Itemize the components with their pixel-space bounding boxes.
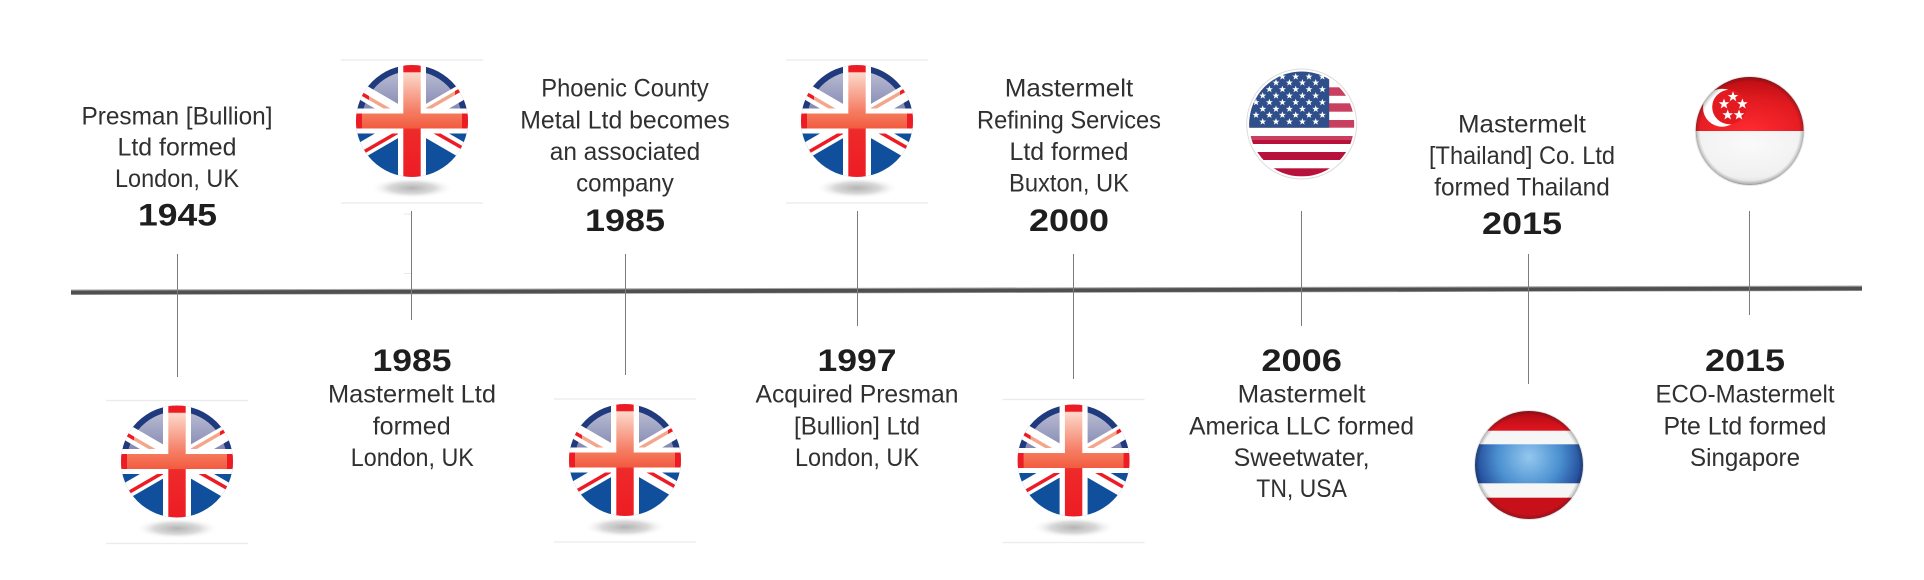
milestone: 1985 Mastermelt Ltd: Mastermelt Ltd <box>328 381 496 409</box>
milestone: 1985 Phoenic County: Metal Ltd becomes <box>520 106 730 134</box>
milestone: 1997 Acquired Presman: London, UK <box>795 444 919 472</box>
milestone: 2015 ECO-Mastermelt: Singapore <box>1690 444 1800 472</box>
milestone: 1945 Presman [Bullion] <box>82 102 272 233</box>
milestone: 2015 Mastermelt [Thailand]: 2015 <box>1482 205 1562 241</box>
milestone: 2015 ECO-Mastermelt: Pte Ltd formed <box>1664 412 1826 440</box>
milestone: 2006 Mastermelt America LLC: Sweetwater, <box>1234 444 1370 472</box>
milestone: 2006 Mastermelt America LLC <box>1189 342 1414 503</box>
milestone: 1997 Acquired Presman <box>756 342 958 472</box>
milestone: 1985 Phoenic County: Phoenic County <box>541 75 709 103</box>
milestone: 2006 Mastermelt America LLC: America LLC formed <box>1189 412 1414 440</box>
milestone: 2000 Mastermelt Refining Services: Mastermelt <box>1005 75 1133 103</box>
milestone: 1985 Mastermelt Ltd: formed <box>373 412 451 440</box>
milestone: 1997 Acquired Presman: Acquired Presman <box>756 381 958 409</box>
icon: UK flag 2000 <box>1003 400 1145 542</box>
icon: UK flag 1945 <box>106 400 248 544</box>
milestone: 1945 Presman [Bullion]: 1945 <box>138 197 217 233</box>
milestone: 1985 Phoenic County <box>520 75 730 238</box>
milestone: 1945 Presman [Bullion]: Presman [Bullion] <box>82 102 272 130</box>
milestone: 1945 Presman [Bullion]: London, UK <box>115 165 239 193</box>
milestone: 1985 Mastermelt Ltd <box>328 342 496 472</box>
icon: Thailand flag <box>1474 410 1584 520</box>
icon: UK flag 1997 <box>786 60 928 203</box>
timeline axis <box>71 288 1862 292</box>
milestone: 1985 Mastermelt Ltd: 1985 <box>372 342 452 378</box>
milestone: 2015 ECO-Mastermelt: ECO-Mastermelt <box>1656 380 1834 408</box>
icon: UK flag 1985 Mastermelt Ltd <box>341 60 483 203</box>
milestone: 2015 Mastermelt [Thailand]: formed Thailand <box>1434 174 1610 202</box>
icon: Singapore flag <box>1695 76 1805 186</box>
milestone: 1945 Presman [Bullion]: Ltd formed <box>118 134 236 162</box>
milestone: 1985 Phoenic County: company <box>576 170 674 198</box>
milestone: 2015 Mastermelt [Thailand]: [Thailand] Co. Ltd <box>1429 142 1615 170</box>
milestone: 2000 Mastermelt Refining Services: Refining Services <box>977 106 1161 134</box>
milestone: 1985 Mastermelt Ltd: London, UK <box>351 444 474 472</box>
milestone: 2015 ECO-Mastermelt <box>1656 342 1834 472</box>
milestone: 2015 ECO-Mastermelt: 2015 <box>1705 342 1785 378</box>
milestone: 2006 Mastermelt America LLC: Mastermelt <box>1238 381 1366 409</box>
milestone: 2000 Mastermelt Refining Services: Ltd formed <box>1010 138 1128 166</box>
milestone: 1985 Phoenic County: an associated <box>550 138 700 166</box>
milestone: 2015 Mastermelt [Thailand] <box>1429 110 1615 241</box>
icon: UK flag 1985 Phoenic County <box>554 399 696 542</box>
milestone: 2000 Mastermelt Refining Services: Buxton, UK <box>1009 170 1129 198</box>
milestone: 1997 Acquired Presman: 1997 <box>818 342 896 378</box>
milestone: 2006 Mastermelt America LLC: 2006 <box>1261 342 1342 378</box>
milestone: 2000 Mastermelt Refining Services <box>977 75 1161 238</box>
milestone: 2015 Mastermelt [Thailand]: Mastermelt <box>1458 110 1586 138</box>
milestone: 1985 Phoenic County: 1985 <box>585 202 665 238</box>
milestone: 2006 Mastermelt America LLC: TN, USA <box>1256 475 1347 503</box>
icon: USA flag <box>1247 69 1357 179</box>
leader lines <box>178 211 1750 384</box>
milestone: 2000 Mastermelt Refining Services: 2000 <box>1029 202 1109 238</box>
milestone: 1997 Acquired Presman: [Bullion] Ltd <box>794 412 920 440</box>
